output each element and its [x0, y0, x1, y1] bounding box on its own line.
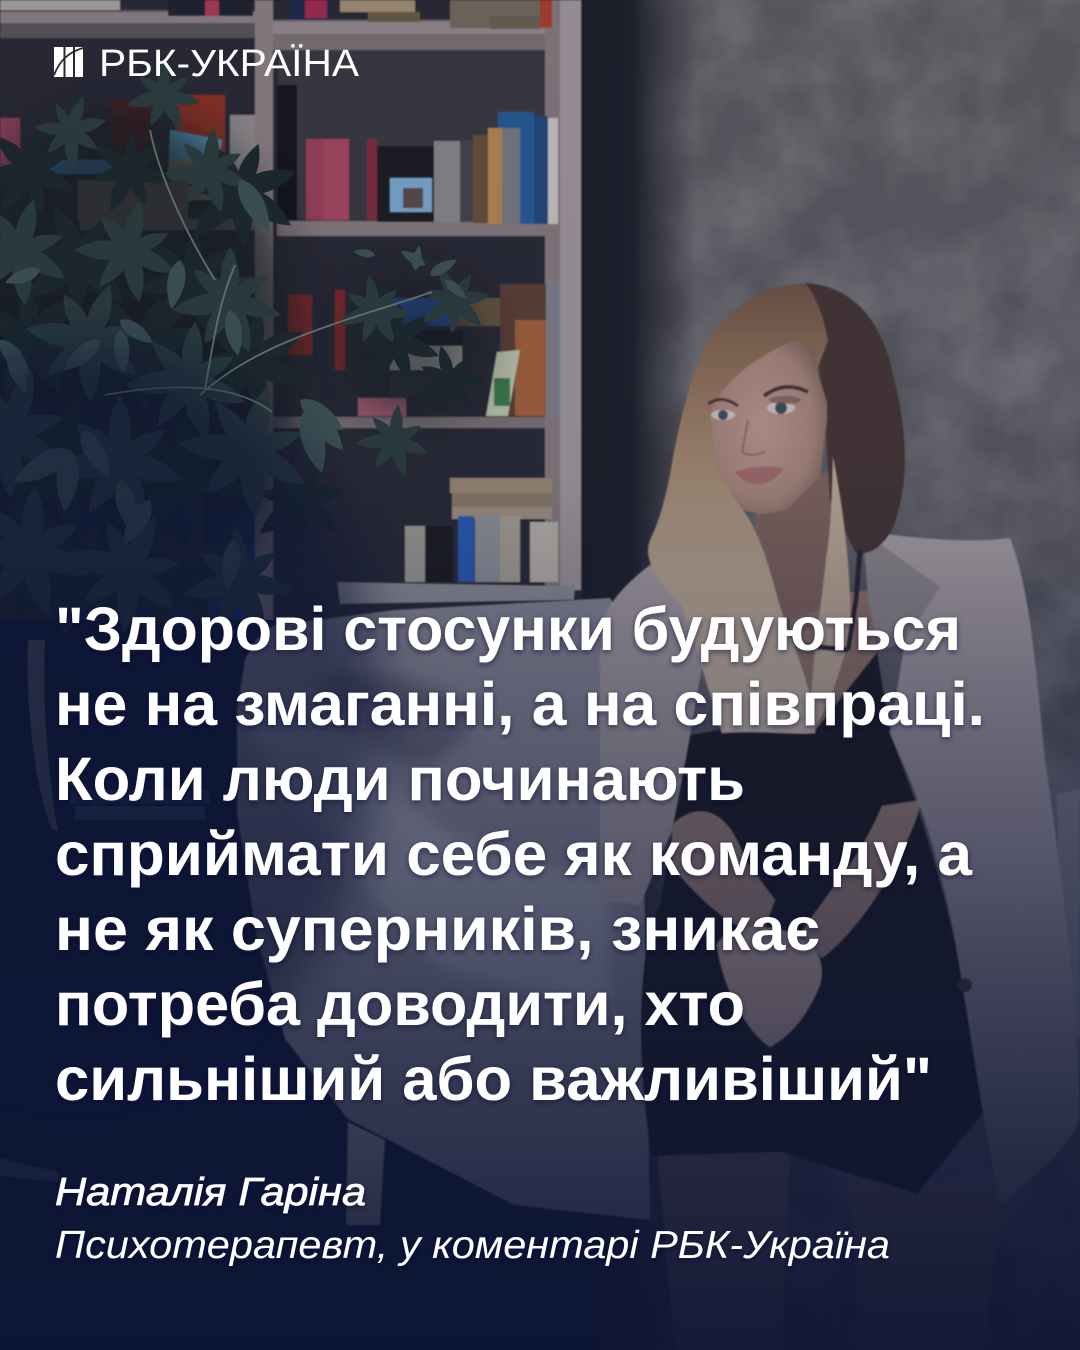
jacket button — [958, 978, 972, 992]
logo wordmark: РБК-УКРАЇНА — [99, 43, 360, 85]
dark hair — [780, 283, 905, 553]
hands — [717, 927, 822, 1047]
chest — [790, 590, 877, 733]
psychotherapist portrait — [600, 283, 1080, 1350]
armchair shading — [250, 716, 610, 1010]
arms — [672, 800, 922, 958]
quote text: Коли люди починають — [55, 745, 745, 813]
books: second shelf left — [0, 95, 255, 220]
necklace — [800, 550, 860, 650]
quote text: сильніший або важливіший" — [55, 1045, 932, 1113]
concrete wall — [580, 0, 1080, 1350]
books: bottom shelf — [60, 478, 558, 620]
face — [710, 340, 827, 514]
books: third shelf — [288, 282, 560, 416]
logo: РБК-Україна — [54, 43, 360, 85]
quote text: "Здорові стосунки будуються — [55, 595, 961, 663]
hair strand — [811, 457, 850, 730]
books: second shelf right — [277, 85, 558, 224]
books: top shelf — [168, 0, 552, 29]
legs — [657, 1145, 1000, 1350]
plant — [0, 50, 503, 679]
dress — [641, 652, 985, 1194]
quote text: потреба доводити, хто — [55, 970, 745, 1038]
armchair — [237, 582, 1080, 1225]
speaker name: Наталія Гаріна — [55, 1171, 366, 1214]
lapel — [863, 532, 940, 652]
navy shadow on the left side — [0, 340, 380, 1100]
nose and smile — [735, 420, 784, 484]
logo icon — [54, 47, 83, 77]
blonde hair — [648, 283, 828, 733]
attribution — [55, 1171, 890, 1267]
quote text: не як суперників, зникає — [55, 895, 820, 963]
jacket left side — [600, 552, 705, 905]
dark floor and left side — [0, 620, 600, 1350]
quote text — [55, 595, 985, 1113]
eyes and brows — [708, 387, 808, 420]
jacket right side — [863, 532, 1080, 1205]
quote text: не на змаганні, а на співпраці. — [55, 670, 985, 738]
speaker role: Психотерапевт, у коментарі РБК-Україна — [55, 1224, 890, 1267]
quote text: сприймати себе як команду, а — [55, 820, 973, 888]
bookcase — [0, 0, 582, 640]
neck — [755, 470, 845, 620]
